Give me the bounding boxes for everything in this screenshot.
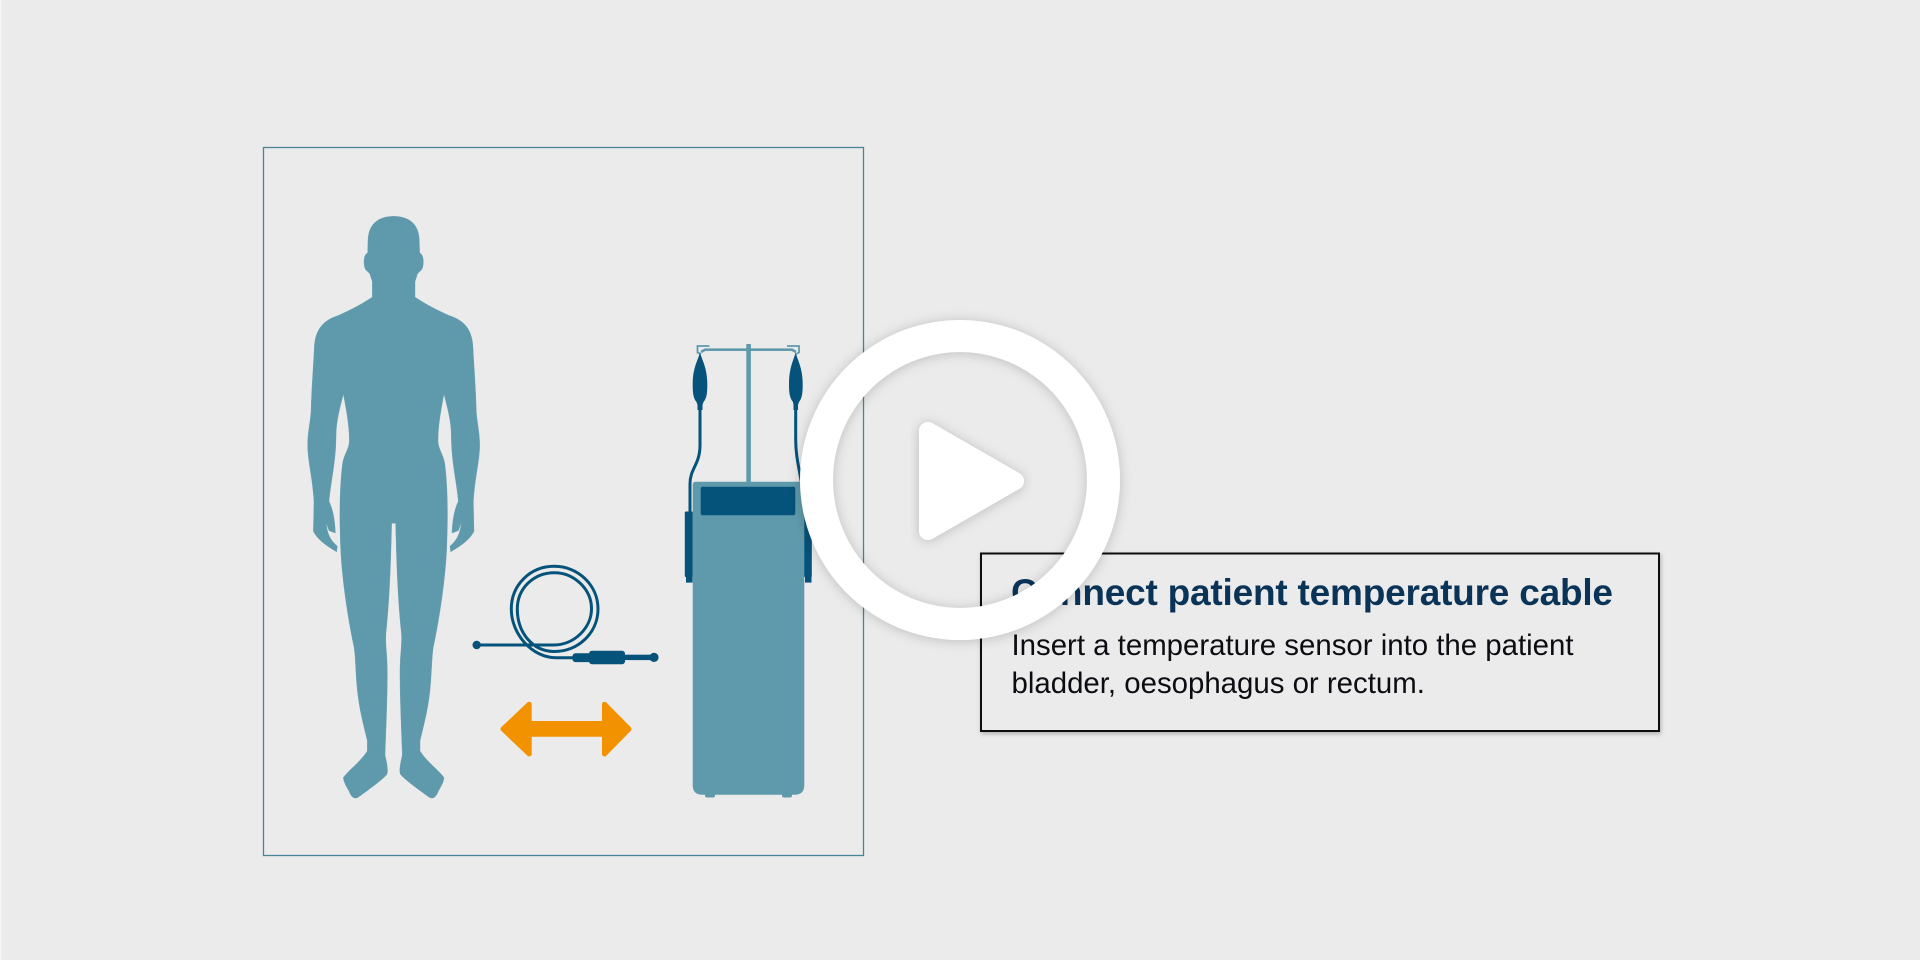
heading: connect patient temperature cable: Connect patient temperature cable <box>1011 572 1613 613</box>
machine display <box>701 487 795 515</box>
right fluid bag and tube <box>789 352 804 514</box>
text block: instruction: bladder, oesophagus or rectum. <box>1012 667 1425 700</box>
callout: step instruction box <box>981 554 1659 731</box>
icon: human body silhouette <box>308 216 480 798</box>
text block: instruction: Insert a temperature sensor into the patient <box>1012 629 1574 662</box>
panel: illustration frame <box>264 148 864 856</box>
trolley cabinet <box>693 482 804 798</box>
icon: treatment machine on trolley <box>685 344 812 798</box>
arrow: orange double-headed connection arrow <box>503 704 629 754</box>
icon: coiled temperature cable <box>472 566 659 664</box>
icon: video play button <box>800 320 1120 640</box>
left fluid bag and tube <box>690 352 707 514</box>
left and right side pumps <box>685 512 812 583</box>
drip stand pole <box>698 344 799 483</box>
